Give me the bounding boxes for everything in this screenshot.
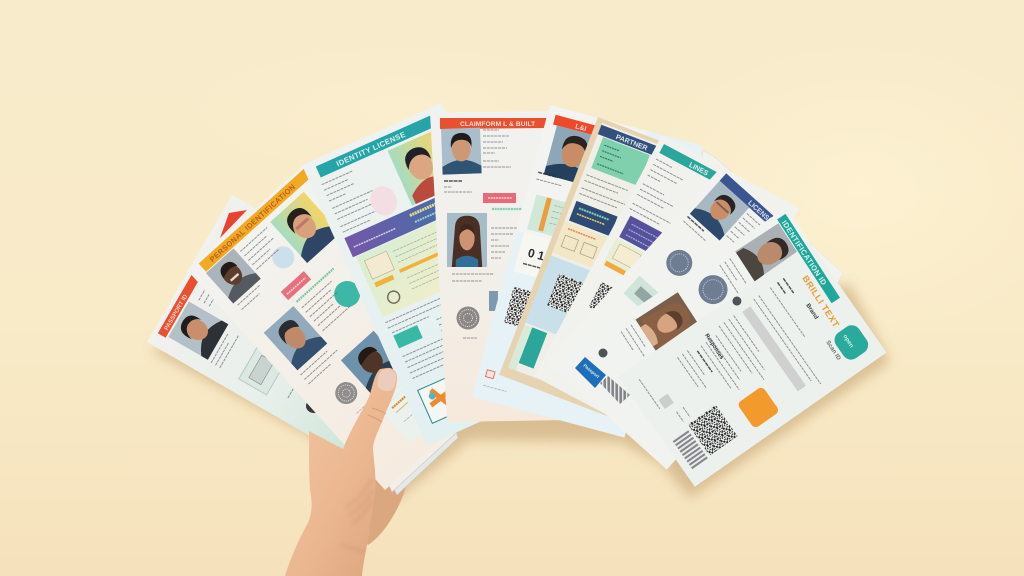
header band: PARTNER — [615, 134, 648, 152]
barcode — [672, 430, 708, 470]
teal block — [519, 327, 547, 369]
knuckle and palm creases — [340, 478, 373, 552]
seal — [456, 306, 480, 330]
mint panel — [527, 195, 580, 241]
side code on front card: Scan ID — [824, 340, 842, 362]
small emblem — [598, 348, 608, 358]
portrait woman — [636, 292, 700, 354]
card 6: beige border navy header — [499, 117, 725, 423]
QR code — [688, 405, 738, 456]
small emblem — [731, 295, 743, 307]
lower pale box — [375, 367, 452, 443]
stamp box — [239, 346, 286, 395]
grey-blue block — [489, 291, 498, 311]
teal circle — [329, 276, 366, 312]
red stamp — [486, 370, 495, 379]
portrait man — [735, 223, 801, 286]
portrait — [544, 125, 601, 186]
header band: LICENSE — [746, 200, 774, 225]
portrait — [690, 181, 749, 241]
QR code — [589, 282, 620, 316]
card 5: light blue with QR — [472, 105, 703, 438]
blue tag — [575, 357, 606, 388]
number block — [514, 233, 572, 284]
portrait middle — [264, 306, 327, 370]
seal — [693, 270, 733, 310]
dark subheading on front card: Brand — [804, 303, 819, 321]
teal tag — [393, 325, 423, 348]
pink button — [281, 271, 311, 300]
button text: open — [841, 334, 854, 349]
QR code — [504, 287, 538, 329]
header band: PASSPORT ID — [164, 293, 190, 332]
orange heading on front card: BRILLI TEXT — [800, 274, 841, 329]
header band: PERSONAL IDENTIFICATION — [208, 182, 297, 264]
header band — [199, 169, 312, 272]
teal header along the right edge: IDENTIFICATION ID — [780, 219, 829, 287]
pink button — [483, 193, 516, 203]
portrait top — [441, 128, 482, 175]
card 9: man and woman portraits — [565, 207, 880, 457]
teal button — [831, 322, 872, 363]
header band — [158, 274, 200, 338]
seal — [331, 378, 362, 409]
thumbnail — [377, 369, 396, 391]
header band — [440, 118, 548, 129]
header band: LINES — [688, 162, 709, 178]
number block: 0 1 — [526, 246, 546, 264]
header band — [553, 115, 604, 137]
small stamp — [658, 394, 674, 409]
teal header along the right edge — [777, 214, 840, 303]
blue tag: Passport — [582, 363, 601, 379]
cream panel — [356, 206, 497, 317]
header band: IDENTITY LICENSE — [335, 130, 407, 168]
cream panel — [602, 238, 657, 286]
orange tile — [737, 386, 780, 429]
blue mark — [268, 242, 299, 273]
portrait bottom — [447, 213, 487, 267]
portrait — [168, 302, 228, 360]
hand: palm and thumb over cards — [285, 368, 397, 576]
card 3: teal header — [302, 103, 567, 445]
portrait lower — [341, 331, 404, 394]
card 10: front card — [618, 243, 887, 487]
back card red corner — [220, 210, 247, 238]
header band: CLAIMFORM L & BUILT — [460, 121, 535, 128]
seal — [661, 245, 698, 281]
header band — [316, 116, 435, 177]
mint block — [591, 137, 650, 186]
bold label: Responses — [703, 333, 724, 361]
dark round stamp peeking — [306, 399, 322, 413]
barcode — [600, 376, 630, 404]
pale map blob — [366, 182, 402, 220]
grey bar — [742, 306, 806, 391]
under layer of card 2 — [300, 300, 458, 495]
card 7: teal header — [534, 135, 799, 449]
header band — [598, 125, 657, 156]
navy block — [569, 201, 618, 236]
portrait top — [270, 192, 341, 263]
purple block — [619, 216, 668, 257]
header band — [659, 144, 719, 182]
hand: fingers behind cards — [340, 470, 408, 545]
card 1: red header — [147, 195, 427, 454]
body text columns — [677, 350, 711, 392]
header band: L&I — [574, 123, 587, 133]
shadow beneath fan — [150, 285, 890, 500]
top white area — [516, 105, 647, 256]
mint panel — [624, 276, 665, 316]
cream panel — [552, 221, 611, 271]
card 8: navy header with man — [546, 165, 843, 470]
header band — [720, 173, 776, 225]
blue panel with QR — [525, 255, 604, 343]
card 2: orange header — [187, 166, 500, 490]
card 4: red header upright — [430, 111, 566, 422]
stamp with orange cross — [418, 375, 467, 423]
purple banner — [344, 185, 472, 257]
portrait left — [206, 248, 261, 303]
portrait — [388, 130, 460, 206]
back sliver of extra card — [700, 150, 843, 283]
